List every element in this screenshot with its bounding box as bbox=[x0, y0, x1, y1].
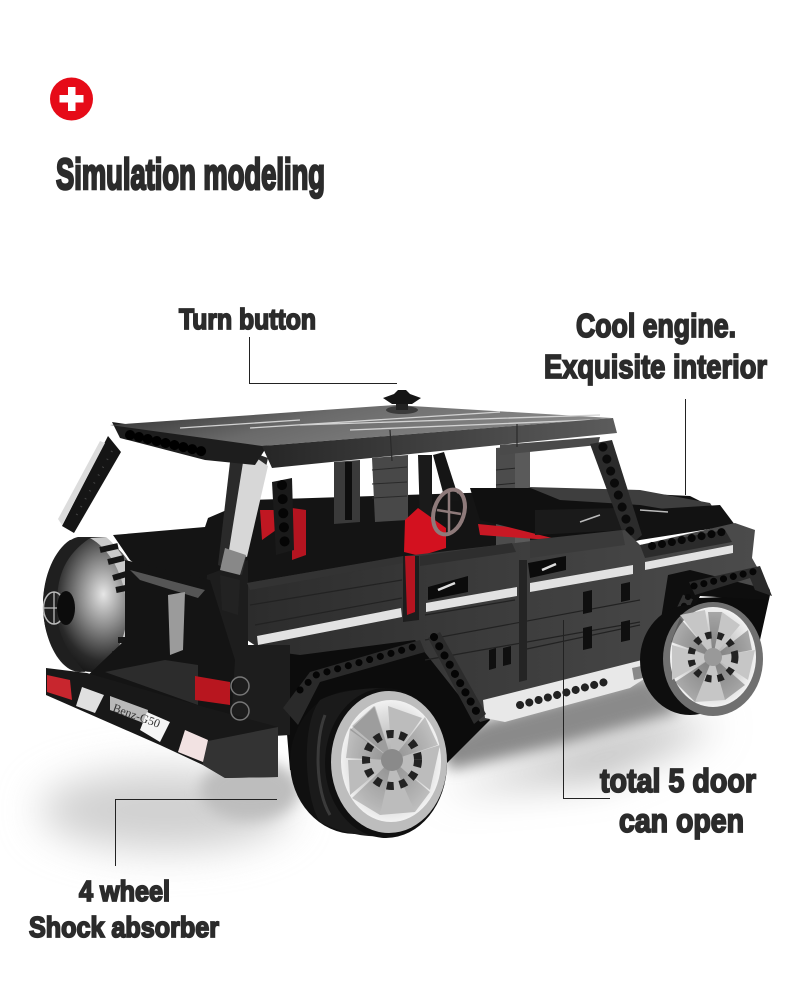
rear door frame bbox=[58, 436, 121, 533]
roof rear beam bbox=[112, 422, 268, 465]
icon: red plus badge bbox=[50, 78, 93, 120]
white side stripes bbox=[257, 545, 733, 645]
front wheel bbox=[640, 602, 763, 716]
callout: doors bbox=[564, 620, 756, 839]
cabin interior bbox=[113, 490, 640, 620]
callout: turn button bbox=[179, 304, 397, 384]
ground shadow bbox=[40, 675, 720, 850]
arch fill behind wheels bbox=[280, 595, 770, 770]
rear bumper bbox=[46, 668, 278, 778]
windscreen pillar beam bbox=[590, 440, 642, 547]
callout: doors: total 5 door bbox=[600, 762, 756, 799]
steering wheel bbox=[428, 485, 470, 539]
engine and hood bbox=[470, 487, 735, 540]
callout: engine and interior: Cool engine. bbox=[576, 307, 736, 344]
rear suspension beam bbox=[283, 632, 486, 725]
window pillars bbox=[334, 437, 600, 560]
rear wheel bbox=[290, 688, 447, 838]
turn button knob bbox=[383, 390, 421, 414]
body side bbox=[200, 523, 770, 740]
front fender bbox=[640, 530, 772, 676]
callout: doors: can open bbox=[619, 802, 744, 839]
rear bed bbox=[85, 560, 235, 740]
running board bbox=[483, 658, 655, 722]
spare wheel bbox=[43, 537, 141, 672]
license plate text: Benz-G50 bbox=[111, 701, 162, 731]
title: Simulation modeling bbox=[56, 150, 325, 199]
callout: engine and interior bbox=[544, 307, 767, 495]
red interior parts bbox=[260, 508, 556, 560]
car model bbox=[43, 390, 772, 838]
tail pillar beam bbox=[218, 445, 294, 615]
callout: shock absorber bbox=[29, 800, 277, 944]
callout: shock absorber: Shock absorber bbox=[29, 912, 219, 944]
roof bbox=[110, 405, 617, 468]
callout: turn button: Turn button bbox=[179, 304, 316, 336]
callout: shock absorber: 4 wheel bbox=[79, 876, 170, 908]
